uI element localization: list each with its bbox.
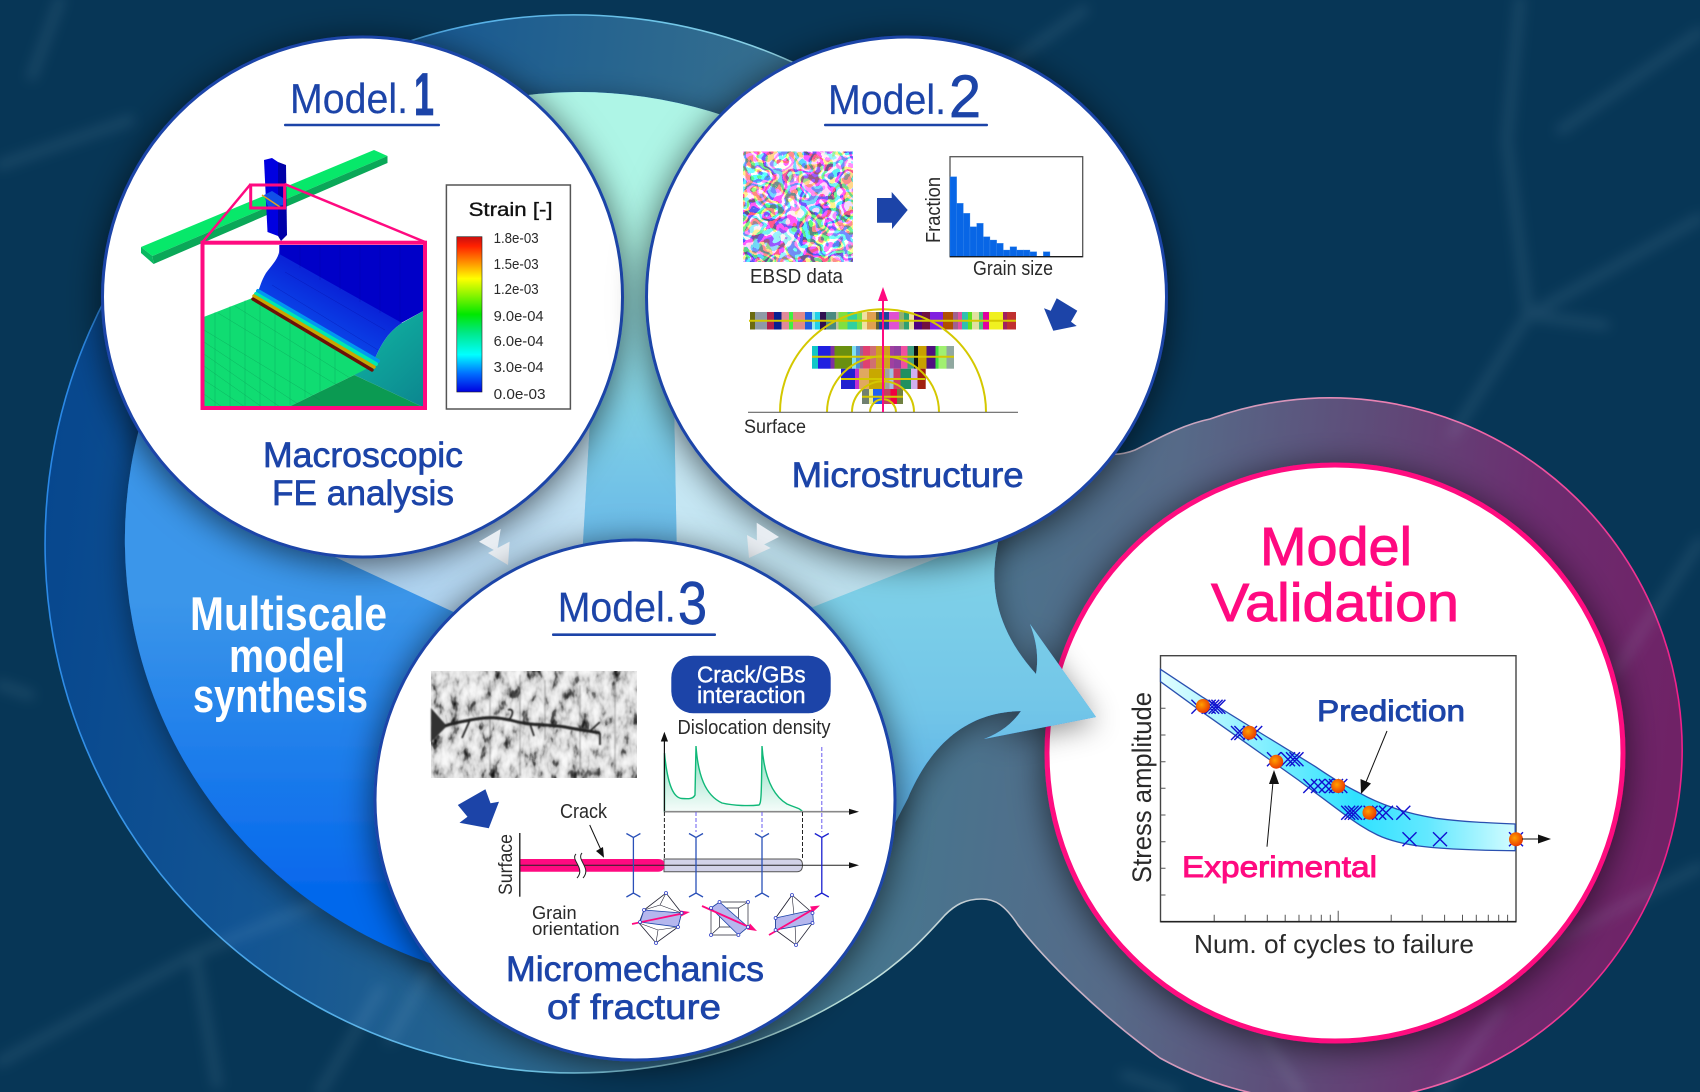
panel: model 3 xyxy=(375,540,895,1060)
heading: multiscale model synthesis: model xyxy=(229,629,345,682)
grain size histogram xyxy=(923,157,1083,280)
label: grain orientation: Grain xyxy=(532,903,577,923)
experimental points xyxy=(1196,699,1523,846)
dislocation density chart xyxy=(661,717,859,860)
crack bar diagram: Surface xyxy=(496,834,517,895)
label: grain orientation xyxy=(532,903,620,939)
crack micrograph xyxy=(431,671,637,778)
heading: model 1: 1 xyxy=(414,61,434,128)
strain legend xyxy=(446,185,570,409)
grain boundary markers xyxy=(626,834,829,897)
callout: crack GBs interaction xyxy=(671,656,831,713)
icon: white double arrows left xyxy=(479,529,510,565)
strain legend: 3.0e-04 xyxy=(494,360,544,376)
heading: model 3: Model. xyxy=(558,584,676,631)
zoom callout frame xyxy=(202,184,425,242)
axis label: number of cycles: Num. of cycles to failure xyxy=(1194,929,1474,959)
grain size histogram: Grain size xyxy=(973,258,1053,280)
icon: white double arrows right xyxy=(747,523,779,558)
crack bar diagram: Crack xyxy=(560,801,608,823)
heading: multiscale model synthesis: Multiscale xyxy=(190,587,387,640)
panel: model 2 xyxy=(646,37,1166,557)
heading: model 2: 2 xyxy=(949,63,981,130)
arrow: micrograph to crack model xyxy=(458,789,499,828)
label: prediction: Prediction xyxy=(1317,695,1465,728)
layered grain microstructure xyxy=(744,287,1018,438)
caption: microstructure: Microstructure xyxy=(792,456,1024,495)
chart frame xyxy=(1160,656,1516,922)
crack bar diagram xyxy=(496,801,859,897)
arrow: histogram to microstructure xyxy=(1044,298,1077,331)
dislocation density chart: Dislocation density xyxy=(678,717,830,739)
heading: model validation xyxy=(1211,517,1459,633)
caption: micromechanics of fracture xyxy=(506,950,764,1027)
heading: model 2: Model. xyxy=(828,76,946,123)
heading: multiscale model synthesis xyxy=(190,587,387,722)
S-N chart xyxy=(1127,656,1551,959)
label: grain orientation: orientation xyxy=(532,919,620,939)
arrow: EBSD to histogram xyxy=(877,192,908,229)
label: experimental: Experimental xyxy=(1182,851,1377,884)
heading: model 2 xyxy=(824,63,988,130)
strain legend: 1.8e-03 xyxy=(494,231,539,247)
strain legend: 9.0e-04 xyxy=(494,309,544,325)
FE model beam xyxy=(141,150,388,264)
zoom frame border xyxy=(202,243,425,408)
EBSD map xyxy=(743,152,853,262)
synthesis disc with arrow xyxy=(110,84,1106,980)
predicted x markers xyxy=(1191,700,1523,846)
callout: crack GBs interaction: Crack/GBs xyxy=(697,662,806,688)
axis label: stress amplitude: Stress amplitude xyxy=(1127,692,1157,883)
arrow: prediction pointer xyxy=(1360,731,1387,794)
heading: multiscale model synthesis: synthesis xyxy=(193,669,368,722)
heading: model 3 xyxy=(552,570,716,637)
strain legend: 0.0e-03 xyxy=(494,387,546,403)
icon: grain crystal 2 xyxy=(702,900,757,936)
heading: model 1: Model. xyxy=(290,75,408,122)
panel: model 1 xyxy=(102,37,622,557)
arrow: experimental pointer xyxy=(1267,770,1279,847)
arrow: runout xyxy=(1522,834,1551,844)
caption: micromechanics of fracture: of fracture xyxy=(547,988,721,1027)
FE mesh close-up xyxy=(202,243,425,408)
callout: crack GBs interaction: interaction xyxy=(697,682,806,708)
panel: model validation circle xyxy=(1047,465,1623,1041)
heading: model 3: 3 xyxy=(678,570,707,637)
prediction band xyxy=(1160,669,1515,851)
layered grain microstructure: Surface xyxy=(744,417,806,438)
caption: macroscopic FE analysis: FE analysis xyxy=(272,474,454,513)
label: EBSD data: EBSD data xyxy=(750,266,844,288)
icon: grain crystal 3 xyxy=(769,894,820,946)
strain legend: 6.0e-04 xyxy=(494,334,544,350)
caption: macroscopic FE analysis: Macroscopic xyxy=(263,436,463,475)
strain legend: 1.2e-03 xyxy=(494,282,539,298)
strain legend: 1.5e-03 xyxy=(494,257,539,273)
icon: grain crystal 1 xyxy=(632,892,690,944)
caption: macroscopic FE analysis xyxy=(263,436,463,513)
strain legend: Strain [-] xyxy=(469,199,553,221)
heading: model validation: Validation xyxy=(1211,573,1459,633)
heading: model 1 xyxy=(284,61,440,128)
heading: model validation: Model xyxy=(1260,517,1412,577)
grain size histogram: Fraction xyxy=(923,177,945,243)
caption: micromechanics of fracture: Micromechanics xyxy=(506,950,764,989)
